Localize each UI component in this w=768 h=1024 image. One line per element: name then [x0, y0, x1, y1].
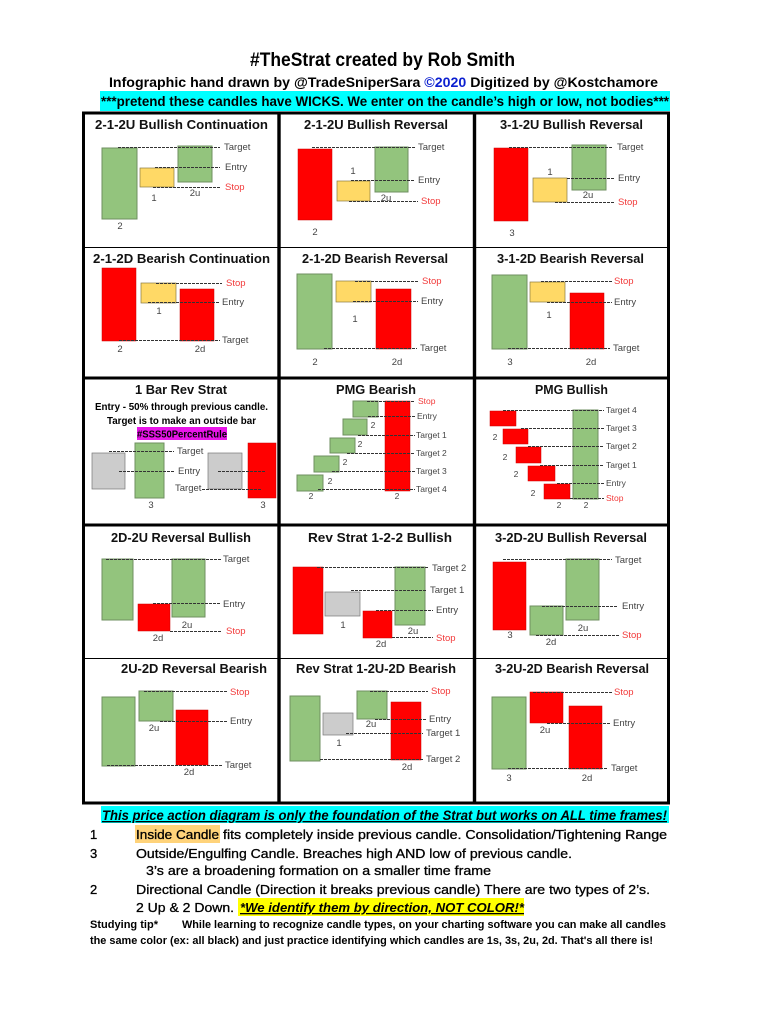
panel: 2-1-2D Bearish Continuation — [93, 251, 270, 355]
panel: 2-1-2D Bearish Reversal: Stop — [422, 276, 442, 287]
panel: Rev Strat 1-2-2 Bullish: Target 1 — [430, 585, 464, 596]
panel: 3-1-2D Bearish Reversal: Entry — [614, 297, 636, 308]
panel: 1 Bar Rev Strat: 3 — [148, 500, 154, 511]
panel: 3-1-2D Bearish Reversal: 3 — [507, 357, 513, 368]
panel: PMG Bearish: 2 — [343, 457, 348, 467]
panel: 2-1-2U Bullish Reversal — [298, 117, 448, 238]
panel: 3-2U-2D Bearish Reversal: Stop — [614, 687, 634, 698]
note text: Entry - 50% through previous candle. — [95, 401, 268, 413]
panel: Rev Strat 1-2U-2D Bearish — [290, 661, 460, 773]
panel: 3-1-2U Bullish Reversal: 1 — [547, 167, 553, 178]
subtitle credits: Infographic hand drawn by @TradeSniperSara ©2020 Digitized by @Kostchamore — [109, 74, 658, 90]
definition: 3 outside candle: 3 — [90, 846, 97, 861]
panel: Rev Strat 1-2U-2D Bearish: 1 — [336, 738, 342, 749]
panel: 3-2D-2U Bullish Reversal: Stop — [622, 630, 642, 641]
heading: 3-1-2D Bearish Reversal — [497, 251, 644, 266]
cyan wicks notice: ***pretend these candles have WICKS. We enter on the candle’s high or low, not bodies*** — [101, 94, 670, 109]
panel: PMG Bullish: 2 — [493, 432, 498, 442]
panel: 2-1-2U Bullish Reversal: Stop — [421, 196, 441, 207]
panel: 3-1-2U Bullish Reversal: 2u — [583, 190, 593, 201]
panel: PMG Bullish: 2 — [557, 500, 562, 510]
panel: PMG Bearish: Entry — [417, 411, 438, 421]
panel: 2D-2U Reversal Bullish: Entry — [223, 599, 245, 610]
panel: PMG Bullish: 2 — [514, 469, 519, 479]
panel: Rev Strat 1-2U-2D Bearish: Target 2 — [426, 754, 460, 765]
panel: 2-1-2D Bearish Continuation: Entry — [222, 297, 244, 308]
cyan foundation banner: This price action diagram is only the foundation of the Strat but works on ALL time frames! — [102, 808, 667, 823]
panel: 2-1-2D Bearish Reversal: 1 — [352, 314, 358, 325]
panel: Rev Strat 1-2U-2D Bearish: Stop — [431, 686, 451, 697]
panel: 1 Bar Rev Strat: Entry — [178, 466, 200, 477]
panel: PMG Bullish — [490, 382, 637, 510]
panel: 2-1-2U Bullish Continuation: Target — [224, 142, 251, 153]
panel: PMG Bullish: Entry — [606, 478, 627, 488]
panel: 2-1-2U Bullish Reversal: Target — [418, 142, 445, 153]
panel: 2-1-2U Bullish Reversal: 2 — [312, 227, 318, 238]
panel: 2-1-2D Bearish Continuation: Target — [222, 335, 249, 346]
panel: 3-1-2U Bullish Reversal: Stop — [618, 197, 638, 208]
panel: PMG Bearish: Target 4 — [416, 484, 447, 494]
panel: 2U-2D Reversal Bearish: Stop — [230, 687, 250, 698]
title: #TheStrat created by Rob Smith — [250, 50, 515, 71]
panel: 2-1-2U Bullish Reversal: 2u — [381, 193, 391, 204]
panel: 2-1-2U Bullish Reversal: 1 — [350, 166, 356, 177]
studying tip: While learning to recognize candle types, on your charting software you can make all candles — [182, 919, 666, 931]
heading: Rev Strat 1-2-2 Bullish — [308, 530, 452, 545]
definition: 3 outside candle: Outside/Engulfing Candle. Breaches high AND low of previous candle. — [136, 846, 572, 861]
panel: 3-2D-2U Bullish Reversal: Target — [615, 555, 642, 566]
panel: PMG Bearish: 2 — [309, 491, 314, 501]
heading: 2-1-2U Bullish Continuation — [95, 117, 268, 132]
panel: PMG Bearish: 2 — [328, 476, 333, 486]
panel: 3-2D-2U Bullish Reversal: Entry — [622, 601, 644, 612]
panel: PMG Bearish: Target 2 — [416, 448, 447, 458]
panel: 1 Bar Rev Strat: Target — [175, 483, 202, 494]
panel: PMG Bearish: Stop — [418, 396, 436, 406]
panel: Rev Strat 1-2-2 Bullish: Target 2 — [432, 563, 466, 574]
panel: 3-1-2U Bullish Reversal: 3 — [509, 228, 515, 239]
heading: 3-1-2U Bullish Reversal — [500, 117, 643, 132]
definition: 2 directional candle: 2 Up & 2 Down. — [136, 900, 234, 915]
heading: PMG Bullish — [535, 382, 608, 397]
heading: Rev Strat 1-2U-2D Bearish — [296, 661, 456, 676]
panel: 2U-2D Reversal Bearish: 2u — [149, 723, 159, 734]
panel: 2-1-2U Bullish Continuation: 2 — [117, 221, 123, 232]
heading: 3-2D-2U Bullish Reversal — [495, 530, 647, 545]
heading: 2-1-2U Bullish Reversal — [304, 117, 448, 132]
studying tip — [90, 919, 666, 947]
panel: Rev Strat 1-2-2 Bullish — [293, 530, 466, 650]
panel: 3-2D-2U Bullish Reversal: 3 — [507, 630, 513, 641]
panel: 1 Bar Rev Strat: 3 — [260, 500, 266, 511]
definition: 1 inside candle: Inside Candle — [136, 827, 219, 842]
panel: 2U-2D Reversal Bearish — [102, 661, 267, 778]
panel: 3-1-2U Bullish Reversal: Entry — [618, 173, 640, 184]
panel: PMG Bearish: 2 — [395, 491, 400, 501]
grid frame — [84, 113, 670, 803]
panel: 3-1-2U Bullish Reversal — [494, 117, 644, 239]
panel: 3-2U-2D Bearish Reversal: 3 — [506, 773, 512, 784]
panel: PMG Bearish: Target 1 — [416, 430, 447, 440]
panel: 2D-2U Reversal Bullish: 2u — [182, 620, 192, 631]
heading: 1 Bar Rev Strat — [135, 382, 228, 397]
definition: 2 directional candle — [90, 882, 650, 916]
panel: 2-1-2D Bearish Reversal: 2 — [312, 357, 318, 368]
hashtag highlight: #SSS50PercentRule — [137, 428, 227, 440]
panel: PMG Bullish: Stop — [606, 493, 624, 503]
panel: 2-1-2D Bearish Reversal: Entry — [421, 296, 443, 307]
panel: 3-1-2U Bullish Reversal: Target — [617, 142, 644, 153]
panel: PMG Bearish: 2 — [371, 420, 376, 430]
definition: 2 directional candle: *We identify them by direction, NOT COLOR!* — [240, 900, 525, 915]
panel: PMG Bearish — [297, 382, 447, 501]
heading: 2-1-2D Bearish Continuation — [93, 251, 270, 266]
panel: 3-2U-2D Bearish Reversal — [492, 661, 649, 784]
panel: PMG Bearish: 2 — [358, 439, 363, 449]
definition: 2 directional candle: 2 — [90, 882, 97, 897]
panel: 2U-2D Reversal Bearish: Entry — [230, 716, 252, 727]
panel: Rev Strat 1-2-2 Bullish: 2d — [376, 639, 386, 650]
panel: 2-1-2U Bullish Continuation: 1 — [151, 193, 157, 204]
panel: 3-1-2D Bearish Reversal: 2d — [586, 357, 596, 368]
panel: PMG Bullish: Target 2 — [606, 441, 637, 451]
panel: PMG Bullish: 2 — [531, 488, 536, 498]
panel: 2-1-2D Bearish Continuation: 2 — [117, 344, 123, 355]
panel: 2-1-2D Bearish Reversal — [297, 251, 448, 368]
panel: 3-1-2D Bearish Reversal — [492, 251, 644, 368]
panel: Rev Strat 1-2U-2D Bearish: 2d — [402, 762, 412, 773]
panel: 1 Bar Rev Strat — [92, 382, 276, 511]
studying tip: the same color (ex: all black) and just practice identifying which candles are 1s, 3s, 2u, 2d. That's all there is! — [90, 935, 653, 947]
panel: 2U-2D Reversal Bearish: Target — [225, 760, 252, 771]
panel: 3-2U-2D Bearish Reversal: Target — [611, 763, 638, 774]
panel: 2-1-2D Bearish Reversal: Target — [420, 343, 447, 354]
definition: 2 directional candle: Directional Candle (Direction it breaks previous candle) There are two types of 2’s. — [136, 882, 650, 897]
panel: 3-2U-2D Bearish Reversal: 2d — [582, 773, 592, 784]
panel: Rev Strat 1-2U-2D Bearish: Entry — [429, 714, 451, 725]
panel: PMG Bullish: 2 — [584, 500, 589, 510]
panel: PMG Bearish: Target 3 — [416, 466, 447, 476]
panel: 3-2D-2U Bullish Reversal: 2d — [546, 637, 556, 648]
panel: 2D-2U Reversal Bullish — [102, 530, 251, 644]
heading: 2D-2U Reversal Bullish — [111, 530, 251, 545]
panel: Rev Strat 1-2U-2D Bearish: 2u — [366, 719, 376, 730]
panel: 2-1-2U Bullish Continuation: 2u — [190, 188, 200, 199]
panel: Rev Strat 1-2-2 Bullish: Entry — [436, 605, 458, 616]
panel: 2-1-2D Bearish Continuation: Stop — [226, 278, 246, 289]
panel: 3-2D-2U Bullish Reversal: 2u — [578, 623, 588, 634]
panel: 3-2U-2D Bearish Reversal: 2u — [540, 725, 550, 736]
panel: PMG Bullish: Target 1 — [606, 460, 637, 470]
panel: 2D-2U Reversal Bullish: Stop — [226, 626, 246, 637]
definition: 1 inside candle: fits completely inside previous candle. Consolidation/Tightening Range — [223, 827, 667, 842]
panel: PMG Bullish: Target 4 — [606, 405, 637, 415]
definition: 3 outside candle — [90, 846, 572, 878]
panel: 3-2U-2D Bearish Reversal: Entry — [613, 718, 635, 729]
panel: 2U-2D Reversal Bearish: 2d — [184, 767, 194, 778]
definition: 1 inside candle — [90, 825, 667, 843]
panel: 2-1-2U Bullish Reversal: Entry — [418, 175, 440, 186]
panel: 3-2D-2U Bullish Reversal — [493, 530, 647, 648]
definition: 3 outside candle: 3’s are a broadening formation on a smaller time frame — [146, 863, 491, 878]
heading: 2-1-2D Bearish Reversal — [302, 251, 448, 266]
definition: 1 inside candle: 1 — [90, 827, 97, 842]
panel: 1 Bar Rev Strat: Target — [177, 446, 204, 457]
panel: 3-1-2D Bearish Reversal: Stop — [614, 276, 634, 287]
studying tip: Studying tip* — [90, 919, 159, 931]
panel: 1 Bar Rev Strat: Target is to make an outside bar — [107, 415, 256, 427]
panel: 2-1-2D Bearish Continuation: 2d — [195, 344, 205, 355]
panel: Rev Strat 1-2-2 Bullish: 2u — [408, 626, 418, 637]
panel: 2D-2U Reversal Bullish: 2d — [153, 633, 163, 644]
panel: 2-1-2D Bearish Reversal: 2d — [392, 357, 402, 368]
panel: 2-1-2D Bearish Continuation: 1 — [156, 306, 162, 317]
panel: Rev Strat 1-2-2 Bullish: Stop — [436, 633, 456, 644]
panel: Rev Strat 1-2-2 Bullish: 1 — [340, 620, 346, 631]
panel: 2-1-2U Bullish Continuation — [95, 117, 268, 232]
panel: 3-1-2D Bearish Reversal: Target — [613, 343, 640, 354]
heading: PMG Bearish — [336, 382, 416, 397]
panel: PMG Bullish: 2 — [503, 452, 508, 462]
heading: 2U-2D Reversal Bearish — [121, 661, 267, 676]
panel: 2-1-2U Bullish Continuation: Stop — [225, 182, 245, 193]
panel: PMG Bullish: Target 3 — [606, 423, 637, 433]
panel: Rev Strat 1-2U-2D Bearish: Target 1 — [426, 728, 460, 739]
panel: 2D-2U Reversal Bullish: Target — [223, 554, 250, 565]
panel: 3-1-2D Bearish Reversal: 1 — [546, 310, 552, 321]
panel: 2-1-2U Bullish Continuation: Entry — [225, 162, 247, 173]
heading: 3-2U-2D Bearish Reversal — [495, 661, 649, 676]
